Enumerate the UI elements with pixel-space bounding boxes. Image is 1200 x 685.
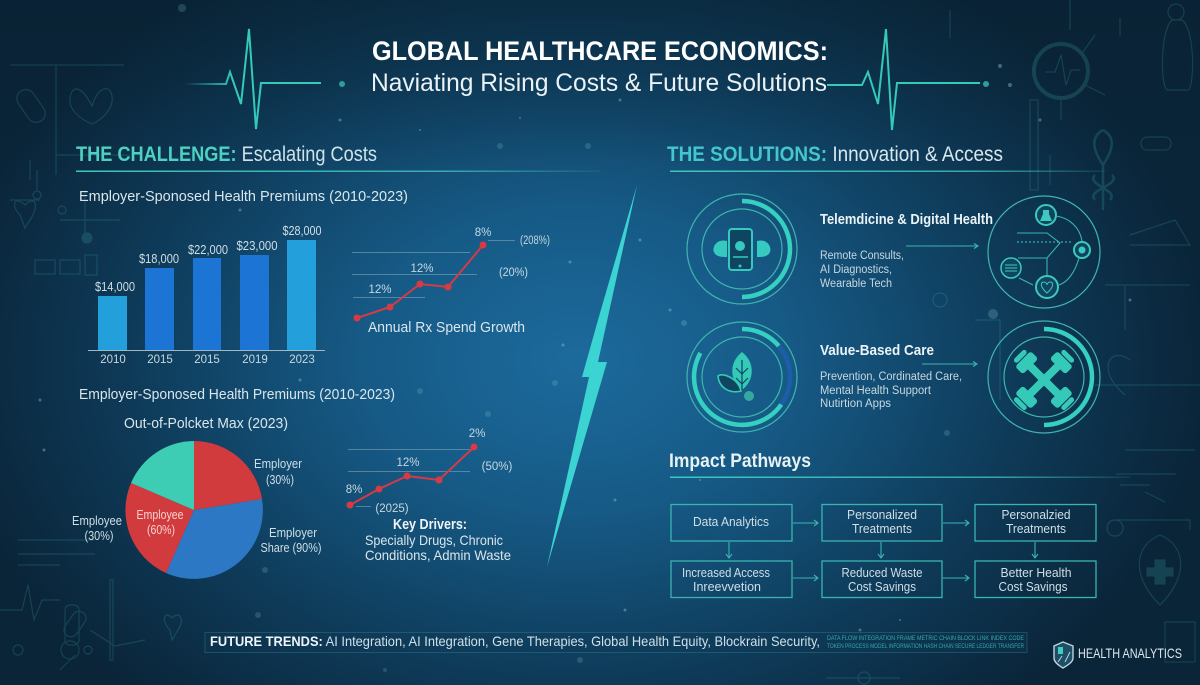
flow diagram: impact pathways: Reduced Waste: [842, 566, 923, 580]
line chart: key drivers: 12%: [396, 457, 420, 469]
pie chart: out-of-pocket share: (30%): [266, 473, 294, 487]
flow diagram: impact pathways: Increased Access: [682, 566, 770, 580]
text: value-based care: Mental Health Support: [820, 385, 932, 397]
bar chart: premiums: $18,000: [139, 252, 179, 266]
footer bar: future trends: TOKEN PROCESS MODEL INFORMATION HASH CHAIN SECURE LEDGER TRANSFER: [827, 644, 1025, 650]
line chart: key drivers: (2025): [375, 503, 409, 515]
flow diagram: impact pathways: Treatments: [1006, 522, 1066, 536]
heading: the solutions: THE SOLUTIONS: Innovation & Access: [667, 143, 1003, 166]
flow diagram: impact pathways: Treatments: [852, 522, 912, 536]
line chart: annual rx spend growth: (20%): [499, 267, 528, 279]
flow diagram: impact pathways: Better Health: [1000, 566, 1072, 580]
flow diagram: impact pathways: [671, 504, 1096, 598]
heading: the challenge: THE CHALLENGE: Escalating Costs: [76, 143, 377, 166]
text: telemedicine: AI Diagnostics,: [820, 264, 892, 276]
line chart: key drivers: 2%: [469, 428, 485, 440]
text: value-based care: Prevention, Cordinated Care,: [820, 371, 962, 383]
pie chart: out-of-pocket share: Employer: [269, 526, 317, 540]
pie chart: out-of-pocket share: Share (90%): [260, 541, 322, 555]
line chart: annual rx spend growth: 12%: [410, 263, 434, 275]
text: telemedicine: Remote Consults,: [820, 250, 904, 262]
line chart: annual rx spend growth: 8%: [475, 227, 491, 239]
flow diagram: impact pathways: Inreevvetion: [693, 580, 761, 594]
icon: fitness dumbbells ring: [988, 321, 1100, 433]
bar chart: premiums: $28,000: [282, 224, 322, 238]
chart heading: premiums: Employer-Sponosed Health Premiums (2010-2023): [79, 188, 408, 205]
arrow: telemedicine to network: [906, 244, 978, 248]
flow diagram: impact pathways: Cost Savings: [998, 580, 1068, 594]
title: GLOBAL HEALTHCARE ECONOMICS:: [372, 36, 828, 66]
pie chart: out-of-pocket share: [72, 441, 322, 579]
footer bar: future trends: [205, 632, 1027, 652]
text: value-based care: Nutirtion Apps: [820, 398, 891, 410]
flow diagram: impact pathways: Data Analytics: [693, 515, 769, 529]
chart heading: out-of-pocket: Out-of-Polcket Max (2023): [124, 415, 288, 432]
arrow: value-based care to fitness: [922, 362, 977, 366]
bar chart: premiums: 2023: [289, 354, 315, 366]
flow diagram: impact pathways: Personalized: [847, 508, 917, 522]
text: key drivers: Specially Drugs, Chronic: [365, 532, 503, 548]
title: Naviating Rising Costs & Future Solutions: [371, 69, 827, 97]
icon: value-based care leaf ring: [687, 322, 797, 432]
pie chart: out-of-pocket share: Employee: [72, 514, 122, 528]
chart heading: premiums second: Employer-Sponosed Health Premiums (2010-2023): [79, 386, 395, 403]
bar chart: premiums: 2019: [242, 354, 268, 366]
line chart: key drivers: [346, 428, 513, 515]
heading: impact pathways: Impact Pathways: [669, 450, 811, 472]
footer bar: future trends: DATA FLOW INTEGRATION FRAME METRIC CHAIN BLOCK LINK INDEX CODE: [827, 636, 1024, 642]
pie chart: out-of-pocket share: Employer: [254, 457, 302, 471]
bar chart: premiums: 2015: [147, 354, 173, 366]
footer bar: future trends: FUTURE TRENDS: AI Integration, AI Integration, Gene Therapies, Global Health Equity, Blockrain Security,: [210, 633, 820, 649]
bar chart: premiums: 2015: [194, 354, 220, 366]
text: key drivers: Key Drivers:: [393, 516, 467, 533]
text: telemedicine: Wearable Tech: [820, 278, 892, 290]
line chart: annual rx spend growth: [352, 227, 550, 336]
heartbeat line right: [827, 29, 989, 130]
flow diagram: impact pathways: Cost Savings: [848, 580, 916, 594]
icon: digital health network: [988, 196, 1100, 308]
text: value-based care: Value-Based Care: [820, 342, 934, 359]
heartbeat line left: [184, 29, 345, 129]
text: telemedicine: [820, 211, 993, 290]
lightning bolt divider: [547, 185, 637, 567]
title: [371, 36, 828, 97]
logo: health analytics: [1054, 642, 1182, 668]
pie chart: out-of-pocket share: Employee: [136, 508, 184, 522]
text: telemedicine: Telemdicine & Digital Health: [820, 211, 993, 228]
bar chart: premiums: [88, 224, 325, 366]
flow diagram: impact pathways: Personalzied: [1002, 508, 1071, 522]
line chart: key drivers: (50%): [482, 461, 513, 473]
bar chart: premiums: 2010: [100, 354, 126, 366]
bar chart: premiums: $23,000: [236, 239, 278, 253]
text: value-based care: [820, 342, 962, 410]
bar chart: premiums: $14,000: [95, 280, 135, 294]
bar chart: premiums: $22,000: [188, 243, 228, 257]
icon: telemedicine phone ring: [687, 194, 797, 304]
text: key drivers: Conditions, Admin Waste: [365, 547, 511, 563]
line chart: annual rx spend growth: 12%: [368, 284, 392, 296]
pie chart: out-of-pocket share: (30%): [84, 529, 114, 543]
text: key drivers: [365, 516, 511, 563]
pie chart: out-of-pocket share: (60%): [147, 523, 175, 537]
line chart: key drivers: 8%: [346, 484, 362, 496]
line chart: annual rx spend growth: (208%): [520, 235, 550, 247]
line chart: annual rx spend growth: Annual Rx Spend Growth: [368, 319, 525, 336]
